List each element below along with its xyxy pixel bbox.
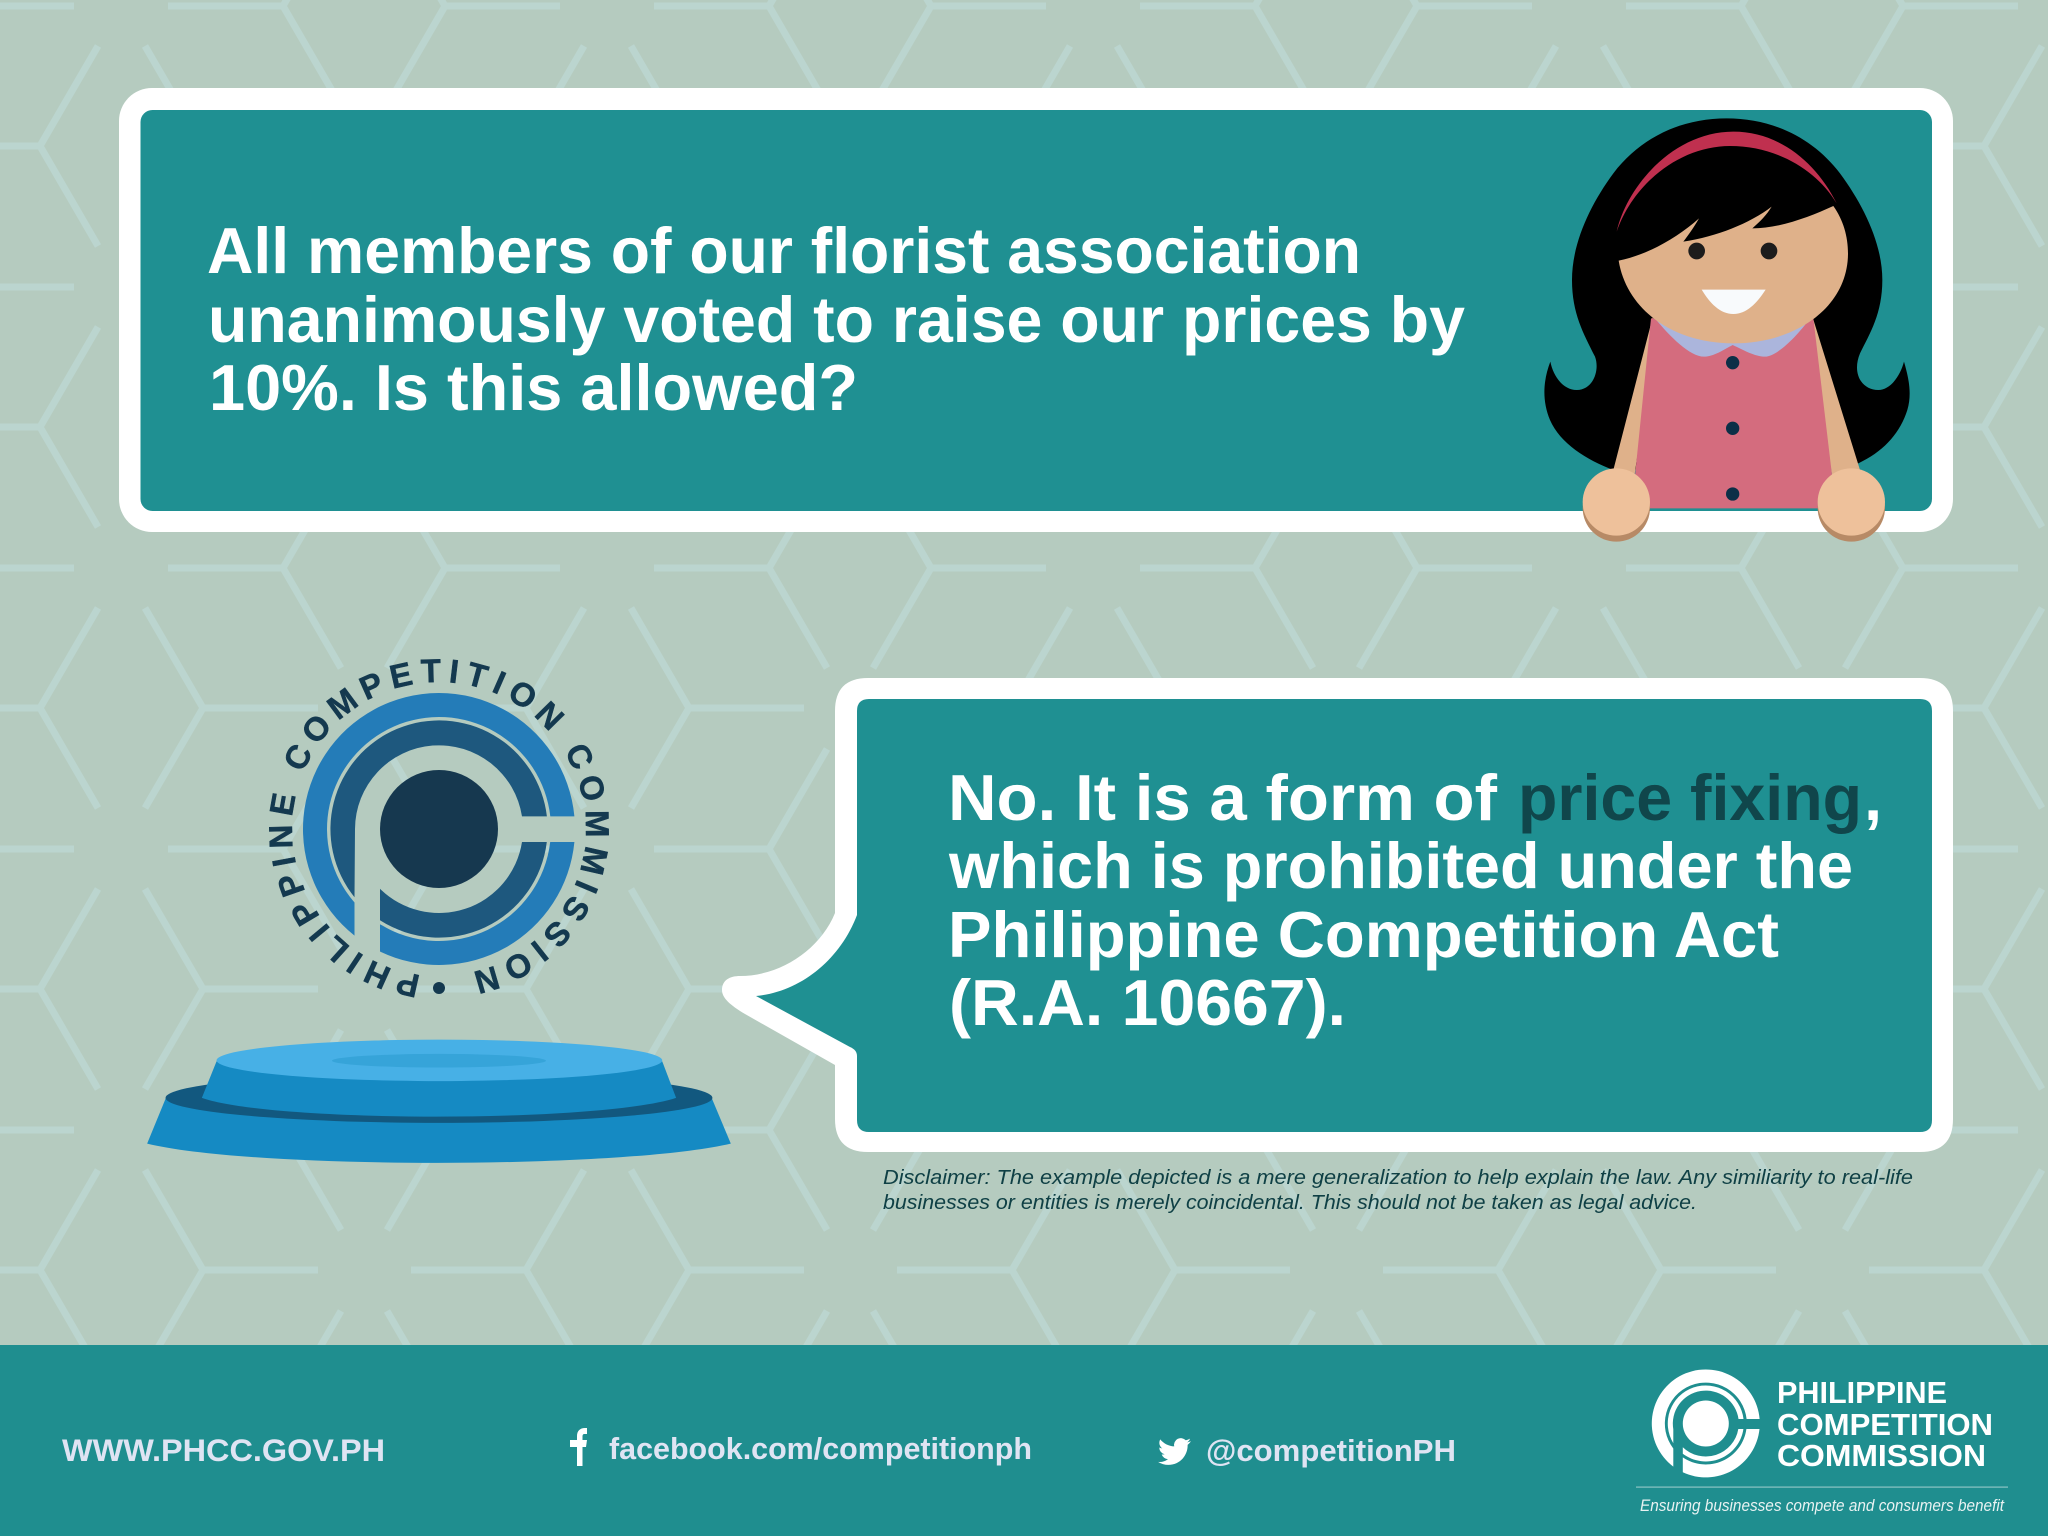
footer logo wordmark: COMMISSION <box>1777 1439 1986 1473</box>
headband <box>1617 132 1837 232</box>
dress <box>1632 318 1836 508</box>
footer logo wordmark: PHILIPPINE <box>1777 1376 1947 1410</box>
buttons <box>1726 356 1739 501</box>
mouth <box>1702 290 1766 314</box>
seal inner ring <box>330 720 547 938</box>
footer band <box>0 1345 2048 1536</box>
hands <box>1583 468 1885 542</box>
footer logo wordmark: COMPETITION <box>1777 1408 1993 1442</box>
twitter handle: @competitionPH <box>1206 1433 1456 1468</box>
face <box>1619 206 1848 343</box>
disclaimer <box>883 1167 1913 1214</box>
icon: florist girl character <box>1544 118 1910 542</box>
answer text <box>948 761 1882 1039</box>
collar <box>1655 297 1810 357</box>
hair <box>1544 118 1910 470</box>
facebook handle: facebook.com/competitionph <box>609 1431 1032 1466</box>
seal outer ring <box>303 693 574 965</box>
arms <box>1613 317 1860 483</box>
eyes <box>1688 243 1777 259</box>
panel: answer speech bubble <box>722 678 1953 1152</box>
answer text: , <box>1864 761 1882 834</box>
answer text: Philippine Competition Act <box>948 898 1779 971</box>
footer logo mark <box>1652 1369 1760 1477</box>
question text <box>207 214 1465 424</box>
footer logo divider <box>1636 1486 2008 1488</box>
panel: question speech box <box>119 88 1953 532</box>
footer website: WWW.PHCC.GOV.PH <box>62 1432 385 1468</box>
question text: All members of our florist association <box>207 214 1361 287</box>
answer text: price fixing <box>1518 761 1862 834</box>
question text: unanimously voted to raise our prices by <box>208 283 1465 356</box>
footer tagline: Ensuring businesses compete and consumers benefit <box>1640 1496 2005 1515</box>
answer text: (R.A. 10667). <box>949 966 1346 1039</box>
icon: blue podium <box>147 1040 731 1163</box>
question text: 10%. Is this allowed? <box>209 351 858 424</box>
answer text: No. It is a form of <box>948 761 1497 834</box>
seal centre dot <box>380 770 498 888</box>
icon: twitter bird <box>1158 1438 1191 1465</box>
seal separator dot <box>433 982 445 994</box>
disclaimer: Disclaimer: The example depicted is a mere generalization to help explain the law. Any similiarity to real-life <box>883 1167 1913 1189</box>
answer text: which is prohibited under the <box>948 829 1853 902</box>
disclaimer: businesses or entities is merely coincidental. This should not be taken as legal advice. <box>883 1192 1697 1214</box>
icon: Philippine Competition Commission circular seal <box>269 659 609 998</box>
seal ring text: PHILIPPINE COMPETITION COMMISSION <box>269 659 609 998</box>
icon: facebook <box>570 1428 587 1466</box>
footer logo wordmark <box>1777 1376 1993 1473</box>
